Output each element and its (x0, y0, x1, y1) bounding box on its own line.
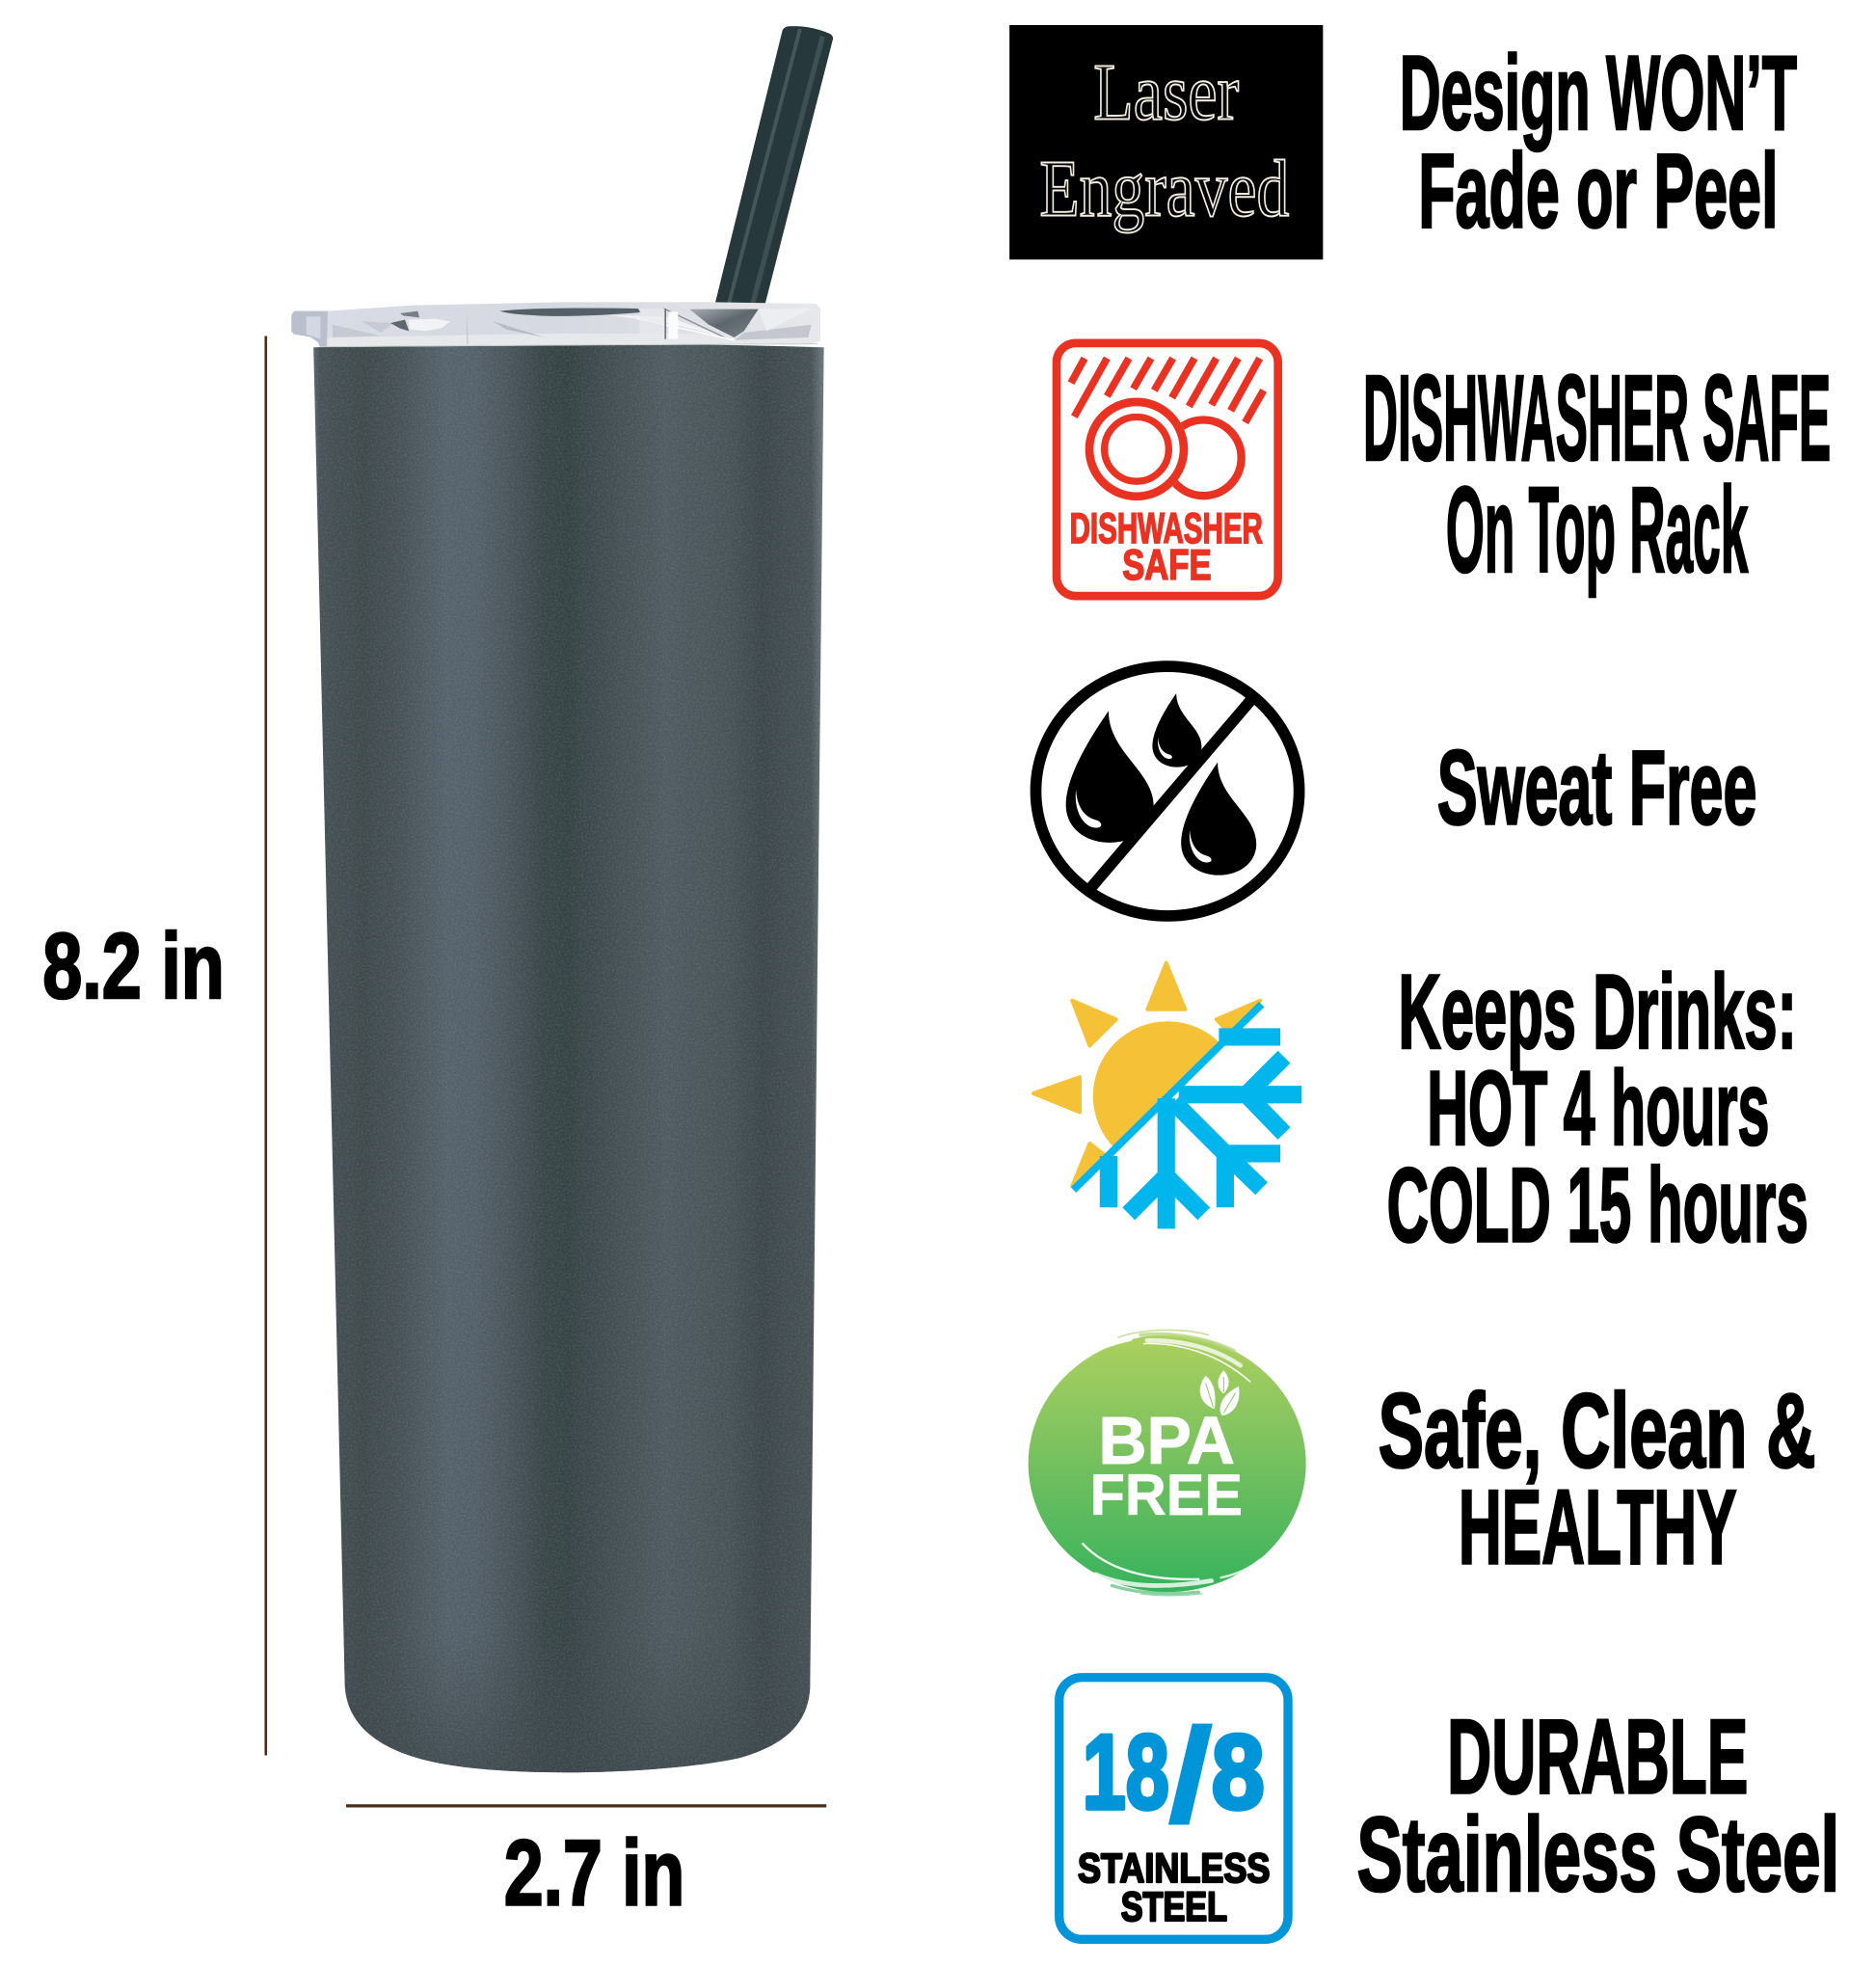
brush strokes (1078, 1330, 1260, 1596)
icon: laser engraved: Engraved (1039, 146, 1289, 234)
icon: dishwasher safe: DISHWASHER (1070, 505, 1263, 552)
icon: hot and cold (1033, 963, 1301, 1228)
icon: 18/8 stainless steel: STEEL (1121, 1884, 1227, 1930)
width dimension line (346, 1804, 826, 1808)
feature text: safe clean healthy (1379, 1372, 1816, 1587)
lid (291, 302, 820, 347)
sun (1033, 963, 1260, 1186)
tumbler body (313, 343, 825, 1777)
width label: 2.7 in (504, 1821, 684, 1925)
feature text: dishwasher (1363, 350, 1831, 598)
height label: 8.2 in (42, 915, 225, 1018)
snowflake (1073, 1005, 1301, 1228)
icon: laser engraved (1009, 25, 1323, 259)
icon: BPA free: BPA (1098, 1403, 1235, 1478)
icon: laser engraved: Laser (1093, 49, 1239, 138)
icon: BPA free: FREE (1090, 1462, 1243, 1527)
icon: 18/8 stainless steel: 18 (1083, 1712, 1169, 1831)
icon: 18/8 stainless steel (1059, 1678, 1288, 1939)
icon: dishwasher safe: SAFE (1122, 542, 1212, 589)
leaves (1200, 1370, 1239, 1415)
icon: 18/8 stainless steel: / (1167, 1699, 1214, 1850)
feature text: keeps drinks (1387, 954, 1809, 1264)
large drop (1066, 711, 1154, 843)
icon: sweat free (1035, 666, 1300, 916)
icon: 18/8 stainless steel: 8 (1212, 1712, 1265, 1831)
right drop (1181, 763, 1256, 875)
height dimension line (264, 337, 267, 1756)
feature text: durable (1356, 1699, 1839, 1914)
tumbler (291, 26, 833, 1777)
straw (714, 26, 833, 305)
icon: dishwasher safe (1057, 343, 1278, 596)
feature text: design (1400, 35, 1797, 250)
icon: 18/8 stainless steel: STAINLESS (1078, 1845, 1270, 1892)
icon: BPA free (1029, 1330, 1306, 1596)
small drop (1152, 693, 1201, 768)
